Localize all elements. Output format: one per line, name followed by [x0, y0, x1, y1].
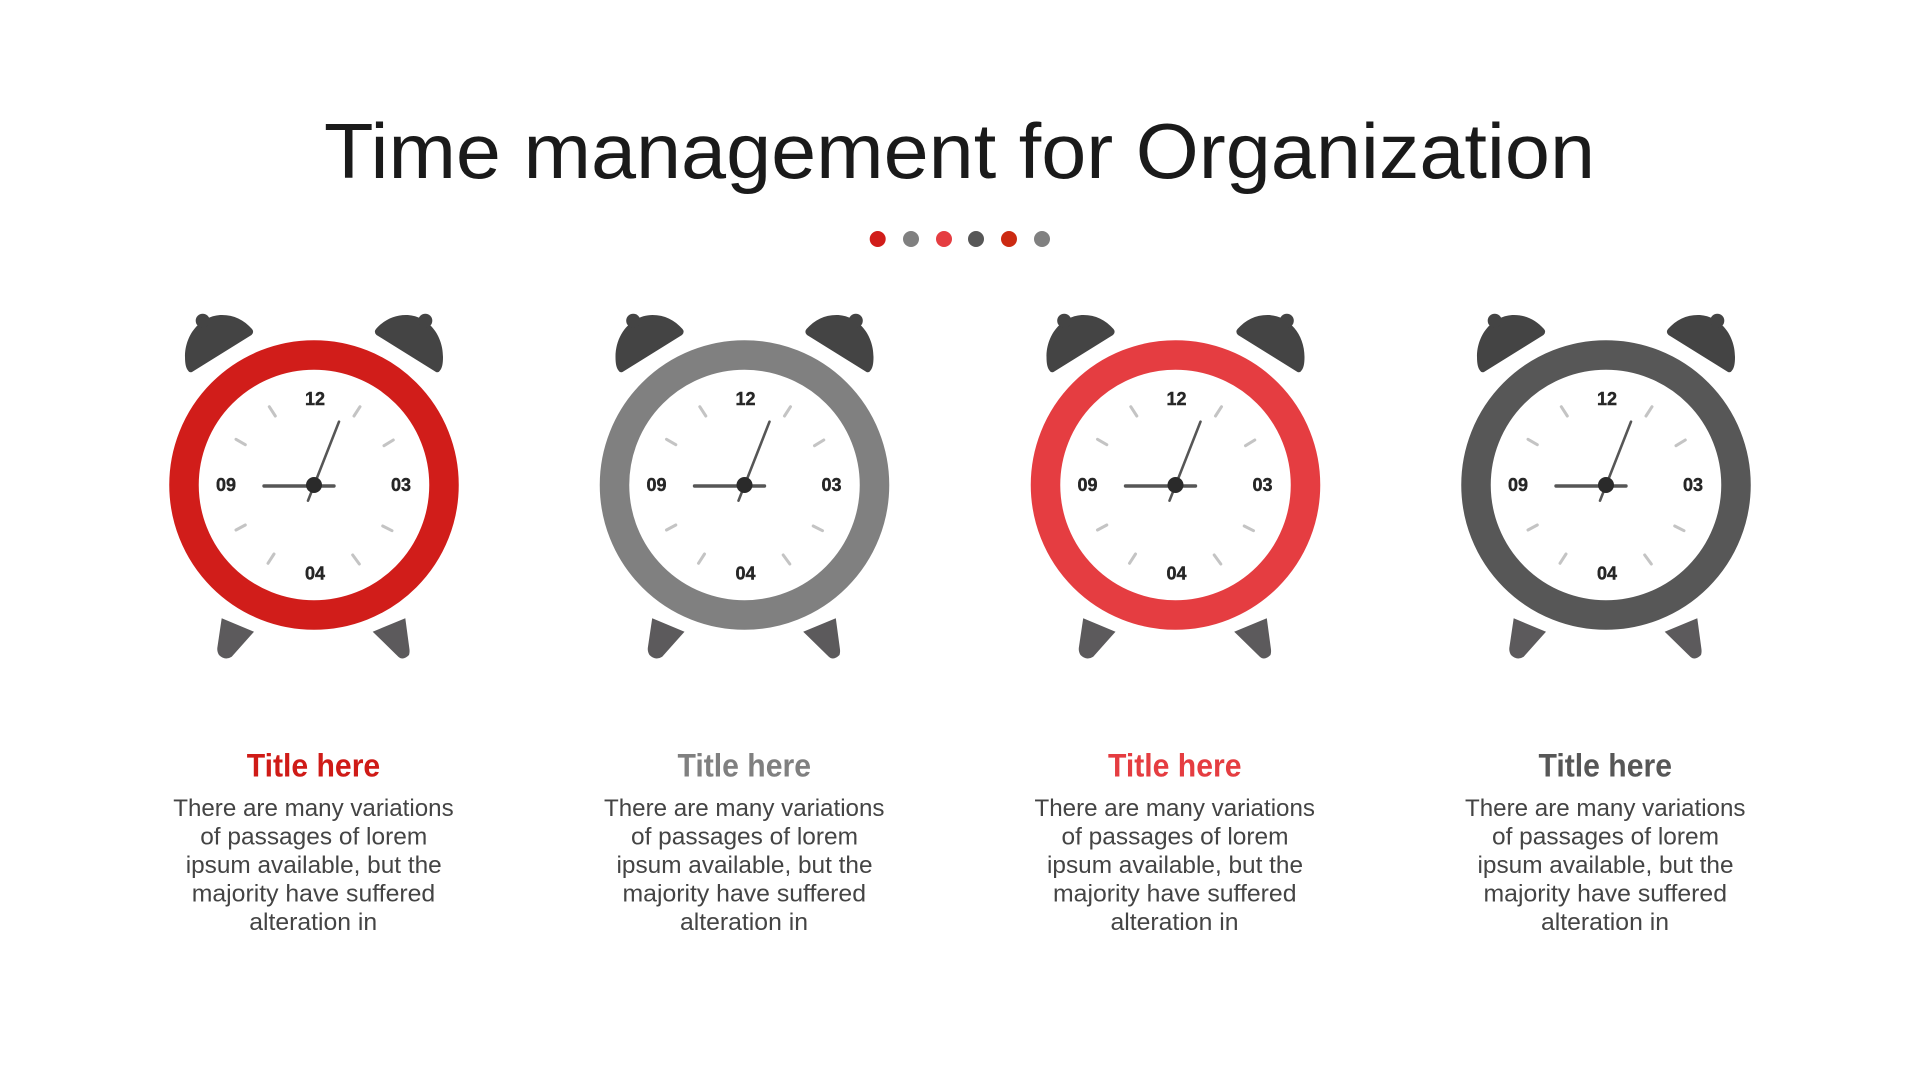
- icon: red alarm clock: 09: [216, 475, 236, 495]
- body: column 1: of passages of lorem: [200, 824, 427, 850]
- icon: dark grey alarm clock: 04: [1597, 563, 1617, 583]
- text block: column 4: [1465, 748, 1746, 936]
- body: column 4: [1465, 795, 1746, 936]
- icon: light red alarm clock: 04: [1166, 563, 1187, 583]
- text block: column 2: [604, 748, 884, 936]
- icon: dark grey alarm clock: [1476, 314, 1736, 658]
- icon: red alarm clock: 03: [391, 475, 411, 495]
- heading: column 4: Title here: [1538, 748, 1672, 784]
- body: column 2: majority have suffered: [622, 880, 866, 908]
- heading: column 1: Title here: [247, 748, 380, 784]
- text block: column 3: [1034, 748, 1315, 936]
- body: column 4: There are many variations: [1465, 795, 1746, 822]
- icon: grey alarm clock: 12: [735, 389, 756, 409]
- icon: grey alarm clock: [614, 314, 874, 658]
- body: column 2: [604, 795, 884, 936]
- body: column 2: alteration in: [680, 909, 808, 936]
- icon: light red alarm clock: [1046, 314, 1306, 658]
- icon: light red alarm clock: 12: [1166, 389, 1187, 409]
- icon: red alarm clock: 04: [305, 563, 325, 583]
- body: column 3: of passages of lorem: [1062, 824, 1288, 850]
- body: column 1: alteration in: [249, 909, 377, 936]
- body: column 1: majority have suffered: [192, 880, 435, 908]
- icon: red alarm clock: 12: [305, 389, 325, 409]
- heading: column 3: Title here: [1108, 748, 1242, 784]
- icon: grey alarm clock: 09: [646, 475, 667, 495]
- body: column 4: alteration in: [1541, 909, 1669, 936]
- icon: light red alarm clock: 09: [1077, 475, 1098, 495]
- text block: column 1: [173, 748, 454, 936]
- icon: red alarm clock: [184, 314, 444, 658]
- body: column 2: There are many variations: [604, 795, 884, 822]
- body: column 3: There are many variations: [1034, 795, 1315, 822]
- icon: light red alarm clock: 03: [1252, 475, 1273, 495]
- body: column 3: [1034, 795, 1315, 936]
- body: column 1: There are many variations: [173, 795, 454, 822]
- body: column 2: of passages of lorem: [631, 824, 858, 850]
- body: column 1: [173, 795, 454, 936]
- icon: grey alarm clock: 04: [735, 563, 756, 583]
- icon: dark grey alarm clock: 12: [1597, 389, 1617, 409]
- body: column 2: ipsum available, but the: [616, 852, 872, 879]
- decorative dot row: [870, 231, 1050, 247]
- body: column 3: majority have suffered: [1053, 880, 1296, 908]
- title: Time management for Organization: [324, 107, 1595, 195]
- heading: column 2: Title here: [678, 748, 811, 784]
- body: column 3: alteration in: [1110, 909, 1238, 936]
- icon: grey alarm clock: 03: [821, 475, 842, 495]
- body: column 4: majority have suffered: [1484, 880, 1727, 908]
- body: column 3: ipsum available, but the: [1047, 852, 1303, 879]
- icon: dark grey alarm clock: 09: [1508, 475, 1528, 495]
- body: column 4: ipsum available, but the: [1478, 852, 1734, 879]
- icon: dark grey alarm clock: 03: [1683, 475, 1703, 495]
- body: column 4: of passages of lorem: [1492, 824, 1719, 850]
- body: column 1: ipsum available, but the: [186, 852, 442, 879]
